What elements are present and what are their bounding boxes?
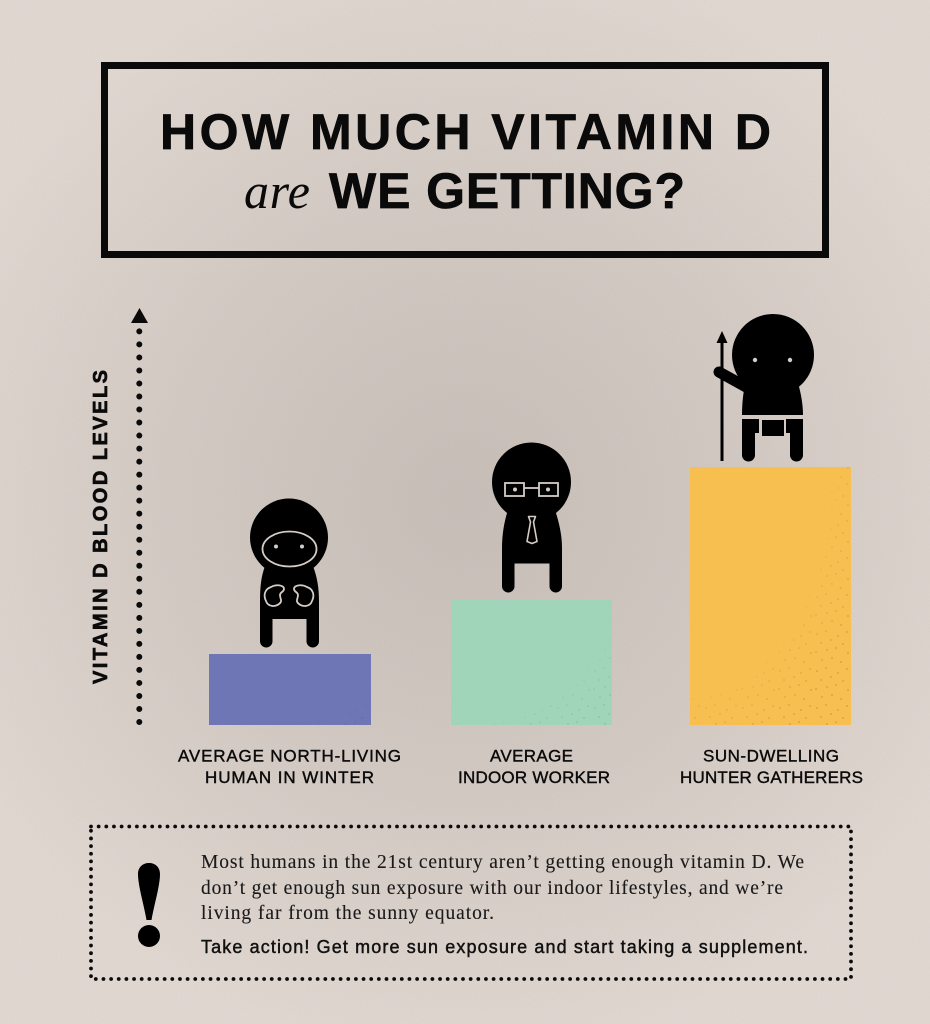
bar: hunter gatherers [690, 467, 851, 725]
figure: indoor worker with glasses and tie [492, 442, 571, 592]
tie [527, 516, 537, 544]
mittens [265, 585, 284, 606]
face opening [262, 532, 316, 566]
right leg [786, 419, 803, 462]
title line 1: HOW MUCH VITAMIN D [160, 104, 771, 160]
label: indoor worker: INDOOR WORKER [458, 768, 610, 787]
label: north-living human: HUMAN IN WINTER [205, 768, 374, 787]
loincloth [762, 420, 784, 436]
label: hunter gatherers: SUN-DWELLING [703, 746, 839, 766]
callout text [201, 852, 808, 957]
callout text: Most humans in the 21st century aren’t getting enough vitamin D. We [201, 852, 804, 873]
figure: hunter gatherer with spear [716, 314, 814, 462]
callout box [91, 826, 851, 979]
label: hunter gatherers: HUNTER GATHERERS [680, 768, 863, 787]
title box [104, 66, 826, 254]
arm [719, 372, 748, 388]
title line 2: are [244, 163, 310, 219]
glasses [505, 483, 558, 496]
left leg [742, 419, 759, 462]
figure: winter human in hood and mittens [250, 498, 328, 648]
callout text: don’t get enough sun exposure with our indoor lifestyles, and we’re [201, 878, 783, 899]
label: indoor worker: AVERAGE [490, 746, 573, 766]
label: hunter gatherers [680, 746, 863, 787]
bar: north-living human [209, 654, 371, 725]
y axis: vitamin D blood levels [90, 308, 148, 722]
call to action: Take action! Get more sun exposure and start taking a supplement. [201, 937, 808, 957]
callout text: living far from the sunny equator. [201, 903, 494, 924]
label: indoor worker [458, 746, 610, 787]
label: north-living human: AVERAGE NORTH-LIVING [178, 746, 401, 766]
axis dotted line [136, 331, 142, 722]
spear [716, 331, 728, 461]
icon: exclamation mark [138, 863, 160, 947]
title line 2: WE GETTING? [329, 163, 685, 219]
axis arrow head [131, 308, 148, 323]
label: north-living human [178, 746, 401, 787]
axis title: VITAMIN D BLOOD LEVELS [90, 370, 112, 684]
bar: indoor worker [451, 600, 612, 725]
